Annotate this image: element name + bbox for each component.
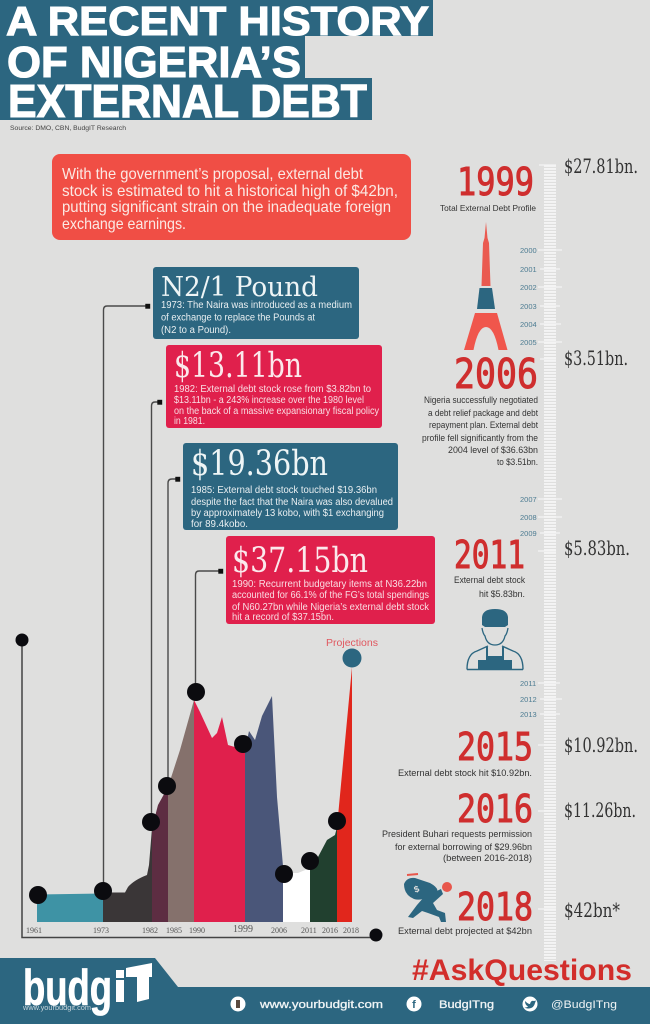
- chart year labels: 2018: [343, 926, 359, 935]
- footer link: twitter: [522, 996, 617, 1012]
- chart year labels: 1982: [142, 926, 158, 935]
- panel: 1982 debt: [166, 345, 382, 428]
- panel: 1985 debt: $19.36bn: [191, 444, 328, 484]
- chart year labels: 1990: [189, 926, 205, 935]
- title: EXTERNAL DEBT: [8, 75, 367, 127]
- chart year labels: 2016: [322, 926, 338, 935]
- ruler year labels: 2008: [520, 513, 537, 522]
- chart year labels: 1961: [26, 926, 42, 935]
- icon: man carrying money bag: $: [412, 884, 421, 895]
- panel: 1985 debt: [183, 443, 398, 530]
- footer link: facebook: BudgITng: [439, 999, 494, 1011]
- timeline entry: 2016: President Buhari requests permission: [382, 829, 532, 839]
- footer link: facebook: [406, 996, 494, 1012]
- connector lines: [104, 304, 222, 890]
- ruler year labels: 2011: [520, 679, 536, 688]
- footer link: twitter: @BudgITng: [551, 999, 617, 1011]
- timeline values: $42bn*: [564, 898, 620, 922]
- panel: 1990 debt: of N60.27bn while Nigeria’s external debt stock: [232, 602, 430, 613]
- chart data points: [29, 683, 346, 904]
- panel: 1982 debt: 1982: External debt stock rose from $3.82bn to: [174, 384, 371, 395]
- projections marker: Projections: [326, 638, 378, 649]
- ruler year labels: 2005: [520, 338, 537, 347]
- icon: man carrying money bag: [404, 874, 452, 922]
- timeline entry: 1999: 1999: [457, 160, 534, 204]
- chart year labels: 1985: [166, 926, 182, 935]
- panel: 1985 debt: by approximately 13 kobo, with $1 exchanging: [191, 508, 384, 519]
- panel: 1990 debt: [226, 536, 435, 624]
- timeline entry: 1999: [440, 160, 536, 213]
- timeline entry: 2018: [398, 885, 533, 936]
- panel: 1985 debt: despite the fact that the Naira was also devalued: [191, 497, 393, 508]
- timeline entry: 2016: for external borrowing of $29.96bn: [395, 842, 532, 852]
- panel: 1985 debt: for 89.4kobo.: [191, 519, 248, 530]
- ruler year labels: 2007: [520, 495, 537, 504]
- chart: external debt area chart: [16, 634, 382, 942]
- icon: eiffel tower: [464, 222, 508, 350]
- title: [0, 0, 433, 127]
- timeline entry: 2016: (between 2016-2018): [443, 853, 532, 863]
- ruler year labels: 2013: [520, 710, 537, 719]
- ruler year labels: 2003: [520, 302, 537, 311]
- timeline entry: 2018: 2018: [457, 885, 533, 929]
- ruler year labels: 2009: [520, 529, 537, 538]
- chart year labels: 2006: [271, 926, 287, 935]
- panel: 1973 naira: [153, 267, 359, 339]
- footer link: website: [230, 996, 383, 1012]
- callout: headline statement: putting significant strain on the inadequate foreign: [62, 199, 391, 216]
- panel: 1982 debt: $13.11bn - a 243% increase over the 1980 level: [174, 395, 364, 406]
- ruler year labels: [520, 246, 537, 719]
- timeline entry: 2006: a debt relief package and debt: [428, 408, 538, 418]
- panel: 1990 debt: accounted for 66.1% of the FG’s total spendings: [232, 590, 429, 601]
- panel: 1990 debt: $37.15bn: [232, 541, 368, 581]
- timeline entry: 2015: External debt stock hit $10.92bn.: [398, 768, 532, 778]
- timeline entry: 2006: to $3.51bn.: [497, 457, 538, 467]
- panel: 1990 debt: 1990: Recurrent budgetary items at N36.22bn: [232, 579, 427, 590]
- timeline values: [564, 154, 638, 922]
- source note: Source: DMO, CBN, BudgIT Research: [10, 125, 126, 132]
- hashtag: #AskQuestions: [412, 954, 632, 987]
- ruler year labels: 2012: [520, 695, 537, 704]
- timeline entry: 2006: 2006: [454, 350, 538, 398]
- timeline entry: 2011: [454, 533, 525, 599]
- icon: worker: [467, 609, 523, 670]
- panel: 1982 debt: on the back of a massive expansionary fiscal policy: [174, 406, 379, 417]
- timeline entry: 2015: [398, 725, 533, 778]
- ruler year labels: 2000: [520, 246, 537, 255]
- callout: headline statement: [52, 154, 411, 240]
- panel: 1973 naira: (N2 to a Pound).: [161, 325, 231, 336]
- footer link: website: www.yourbudgit.com: [259, 999, 383, 1011]
- timeline entry: 2018: External debt projected at $42bn: [398, 926, 532, 936]
- ruler year labels: 2004: [520, 320, 537, 329]
- panel: 1990 debt: hit a record of $37.15bn.: [232, 612, 334, 623]
- ruler year labels: 2001: [520, 265, 537, 274]
- timeline entry: 2006: Nigeria successfully negotiated: [424, 395, 538, 405]
- panel: 1973 naira: of exchange to replace the Pounds at: [161, 312, 315, 324]
- panel: 1985 debt: 1985: External debt stock touched $19.36bn: [191, 485, 377, 496]
- logo: budgit: www.yourbudgit.com: [22, 1005, 91, 1012]
- timeline entry: 2011: 2011: [454, 533, 525, 577]
- chart year labels: [26, 924, 359, 935]
- timeline entry: 2011: hit $5.83bn.: [479, 589, 525, 599]
- timeline entry: 2015: 2015: [457, 725, 533, 769]
- logo: budgit: budg: [23, 960, 112, 1016]
- timeline entry: 1999: Total External Debt Profile: [440, 203, 536, 213]
- timeline entry: 2006: profile fell significantly from the: [422, 433, 538, 443]
- chart year labels: 1973: [93, 926, 109, 935]
- chart year labels: 2011: [301, 926, 317, 935]
- panel: 1973 naira: 1973: The Naira was introduced as a medium: [161, 300, 352, 311]
- footer link: facebook: f: [412, 999, 416, 1011]
- panel: 1982 debt: in 1981.: [174, 416, 205, 427]
- timeline entry: 2016: 2016: [457, 787, 533, 831]
- timeline entry: 2011: External debt stock: [454, 575, 525, 585]
- callout: headline statement: stock is estimated to hit a historical high of $42bn,: [62, 183, 398, 200]
- timeline entry: 2006: [422, 350, 538, 467]
- footer band: [0, 958, 650, 1024]
- timeline entry: 2006: 2004 level of $36.63bn: [448, 445, 538, 455]
- chart year labels: 1999: [233, 924, 253, 935]
- timeline entry: 2016: [382, 787, 533, 863]
- projections marker: [326, 638, 378, 668]
- callout: headline statement: exchange earnings.: [62, 216, 186, 233]
- timeline entry: 2006: repayment plan. External debt: [429, 420, 538, 430]
- ruler year labels: 2002: [520, 283, 537, 292]
- title: OF NIGERIA’S: [7, 38, 301, 87]
- callout: headline statement: With the government’s proposal, external debt: [62, 166, 364, 183]
- panel: 1973 naira: N2/1 Pound: [161, 272, 318, 303]
- timeline ruler: [520, 165, 562, 961]
- panel: 1982 debt: $13.11bn: [174, 346, 302, 386]
